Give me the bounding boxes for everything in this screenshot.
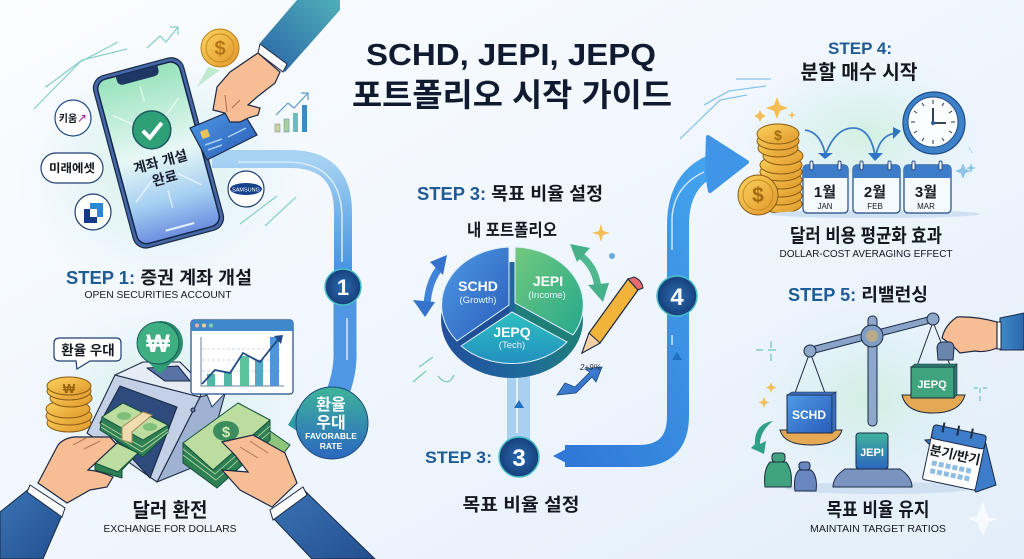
balance scale: JEPI: [860, 447, 884, 459]
check icon: [133, 111, 171, 149]
pie chart: SCHD: [458, 278, 498, 294]
background glows: [15, 45, 995, 500]
balance scale: [785, 313, 975, 494]
speech bubble: 환율 우대: [61, 343, 115, 358]
title: SCHD, JEPI, JEPQ: [366, 37, 656, 72]
panel: lower step 3: [425, 437, 580, 515]
favorable rate bubble: FAVORABLE: [305, 431, 357, 441]
title: [352, 37, 672, 113]
small sparkles: [956, 147, 975, 178]
step 1 subtitle: OPEN SECURITIES ACCOUNT: [84, 289, 232, 301]
pie chart: [441, 247, 583, 378]
small bar chart icon: [275, 93, 308, 132]
step 2 heading: 달러 환전: [132, 499, 208, 522]
step 5 caption: 목표 비율 유지: [826, 499, 930, 521]
calendars: 3월: [915, 184, 937, 201]
gold sparkles: [758, 382, 776, 408]
sparkles: [754, 97, 796, 122]
small blue arrow with formula: [557, 363, 602, 395]
favorable rate bubble: RATE: [320, 441, 343, 451]
number 3: 3: [512, 445, 526, 472]
calendars: JAN: [817, 202, 833, 211]
calendar: 분기/반기: [928, 442, 982, 468]
pie chart: (Tech): [499, 340, 525, 351]
credit card: [190, 107, 257, 160]
clock: [903, 92, 965, 154]
number 1: [325, 269, 361, 305]
flow arrow: step 3 to step 4: [514, 137, 747, 465]
broker badges: [41, 100, 264, 230]
left hand with sleeve: [0, 437, 116, 559]
broker badges: 키움↗: [59, 112, 87, 125]
speech bubble: [54, 338, 121, 369]
green curved arrow: [751, 421, 773, 454]
calendars: MAR: [917, 202, 935, 211]
step 4 subtitle: DOLLAR-COST AVERAGING EFFECT: [780, 248, 953, 260]
won pin: ₩: [146, 330, 170, 358]
calendar: [922, 421, 996, 492]
machine: [87, 362, 226, 482]
sleeve and hand holding card: [213, 0, 340, 122]
speed lines: [680, 79, 771, 139]
sparkle and dot: [592, 224, 615, 259]
decorative trend lines: [34, 27, 296, 226]
step 3 heading: STEP 3: 목표 비율 설정: [417, 184, 603, 204]
panel: step 3 pie: [413, 184, 643, 395]
step 4 caption: 달러 비용 평균화 효과: [790, 225, 942, 247]
flow path: step 1 to bubble: [212, 159, 347, 392]
coin stack: [757, 124, 803, 213]
phone: 계좌 개설: [131, 147, 189, 177]
number 3: [499, 437, 539, 477]
won coins: ₩: [63, 381, 76, 396]
hand with weight: [937, 313, 1024, 360]
sparkles: [756, 341, 987, 401]
bills stack right: $: [222, 424, 231, 441]
favorable rate bubble: [288, 387, 368, 459]
calendars: [770, 161, 980, 218]
step 4 heading: STEP 4:: [828, 39, 892, 58]
panel: step 5: [751, 285, 1024, 536]
step 2 subtitle: EXCHANGE FOR DOLLARS: [104, 523, 236, 535]
pie chart: (Income): [528, 290, 566, 301]
panel: step 2 exchange: [0, 320, 375, 559]
won pin: [137, 321, 183, 374]
phone: [91, 55, 226, 251]
left pan with SCHD: [780, 392, 842, 445]
won coins: [46, 377, 92, 432]
number 4: 4: [670, 284, 684, 311]
favorable rate bubble: 우대: [316, 414, 346, 432]
broker badges: 미래에셋: [49, 161, 95, 175]
speech tail and dollar coin: [197, 29, 239, 87]
small blue arrow with formula: 2+9%: [579, 363, 601, 372]
step 4 title: 분할 매수 시작: [800, 61, 918, 84]
pie chart: (Growth): [460, 295, 496, 306]
title: 포트폴리오 시작 가이드: [352, 77, 672, 113]
weights: [765, 453, 816, 491]
bills stack right: [183, 403, 290, 488]
flow path: pie to step 3 circle: [507, 376, 530, 440]
speech tail and dollar coin: $: [214, 38, 226, 60]
pie title: 내 포트폴리오: [467, 221, 557, 240]
front coin: $: [752, 184, 764, 207]
favorable rate bubble: 환율: [316, 396, 346, 414]
rotate arrows: [413, 244, 609, 317]
panel: step 4: [680, 39, 980, 260]
coin stack: $: [774, 127, 782, 143]
white sparkle: [967, 502, 999, 536]
chart window: [191, 320, 293, 407]
number 1: 1: [337, 275, 349, 300]
pie chart: JEPI: [533, 273, 563, 289]
left pan with SCHD: SCHD: [792, 408, 826, 422]
panel: step 1: [34, 0, 340, 301]
calendars: 2월: [864, 184, 886, 201]
broker badges: SAMSUNG: [232, 188, 260, 194]
right pan with JEPQ: JEPQ: [917, 379, 947, 391]
bills in machine: [95, 403, 168, 478]
step 3 label: STEP 3:: [425, 448, 492, 467]
decorative marks: [413, 357, 454, 382]
right pan with JEPQ: [902, 364, 965, 413]
bouncing arrows: [805, 127, 901, 161]
number 4: [657, 276, 697, 316]
phone: 완료: [150, 167, 179, 189]
step 5 heading: STEP 5: 리밸런싱: [788, 285, 928, 305]
right hand with sleeve: [222, 435, 375, 559]
pencil: [582, 277, 643, 353]
pie chart: JEPQ: [493, 324, 531, 340]
calendars: 1월: [814, 184, 836, 201]
lower step 3 caption: 목표 비율 설정: [462, 495, 580, 515]
step 5 subtitle: MAINTAIN TARGET RATIOS: [810, 523, 946, 535]
calendars: FEB: [867, 202, 883, 211]
front coin: [738, 175, 778, 215]
step 1 heading: STEP 1: 증권 계좌 개설: [66, 268, 252, 288]
